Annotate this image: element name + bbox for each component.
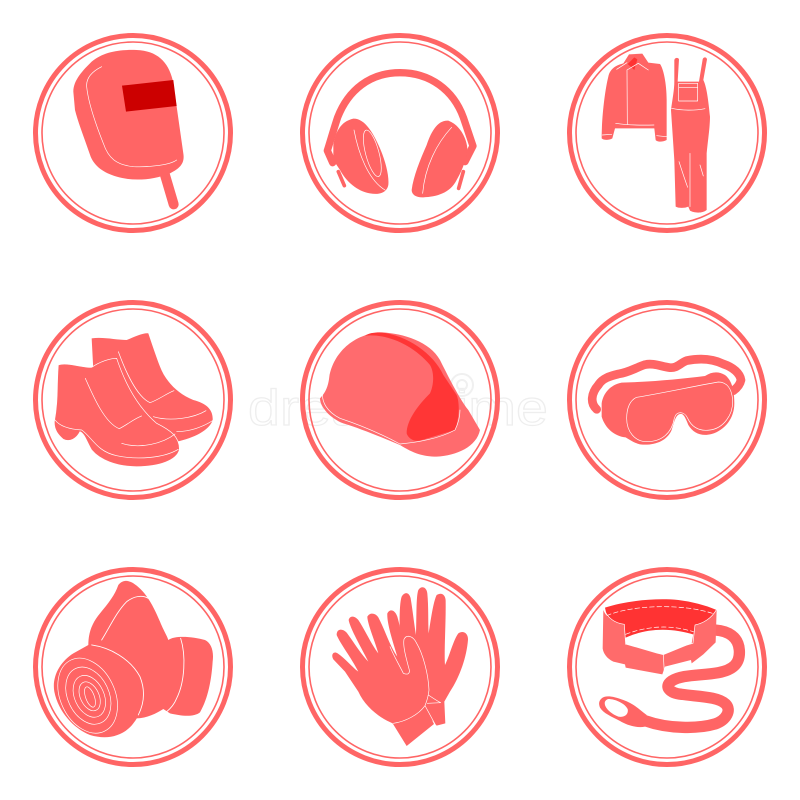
icon: work gloves	[332, 587, 468, 746]
badge: safety goggles	[570, 302, 764, 498]
icon: safety belt	[599, 599, 739, 727]
overalls	[671, 57, 710, 213]
badge: safety belt	[570, 570, 764, 764]
icon: safety goggles	[592, 359, 741, 445]
badge: work clothes	[570, 36, 764, 230]
filter cartridge	[46, 645, 143, 743]
icon: work clothes	[602, 54, 710, 213]
icon: respirator	[46, 581, 213, 743]
icon: hard hat	[320, 332, 480, 457]
badge: work gloves	[302, 570, 498, 764]
lanyard	[645, 630, 739, 727]
badge: ear muffs	[302, 36, 498, 230]
icon: ear muffs	[327, 73, 473, 197]
badge: welding mask	[36, 36, 230, 230]
back glove	[400, 587, 468, 726]
badge: respirator	[36, 570, 230, 764]
watermark: dreamstime	[248, 380, 548, 436]
mask body	[88, 581, 213, 718]
front glove	[332, 610, 434, 746]
belt	[603, 599, 717, 674]
badge: safety boots	[36, 302, 230, 498]
icon: safety boots	[54, 333, 213, 467]
badge: hard hat	[302, 302, 498, 498]
jacket	[602, 54, 667, 142]
icon: welding mask	[73, 50, 184, 204]
